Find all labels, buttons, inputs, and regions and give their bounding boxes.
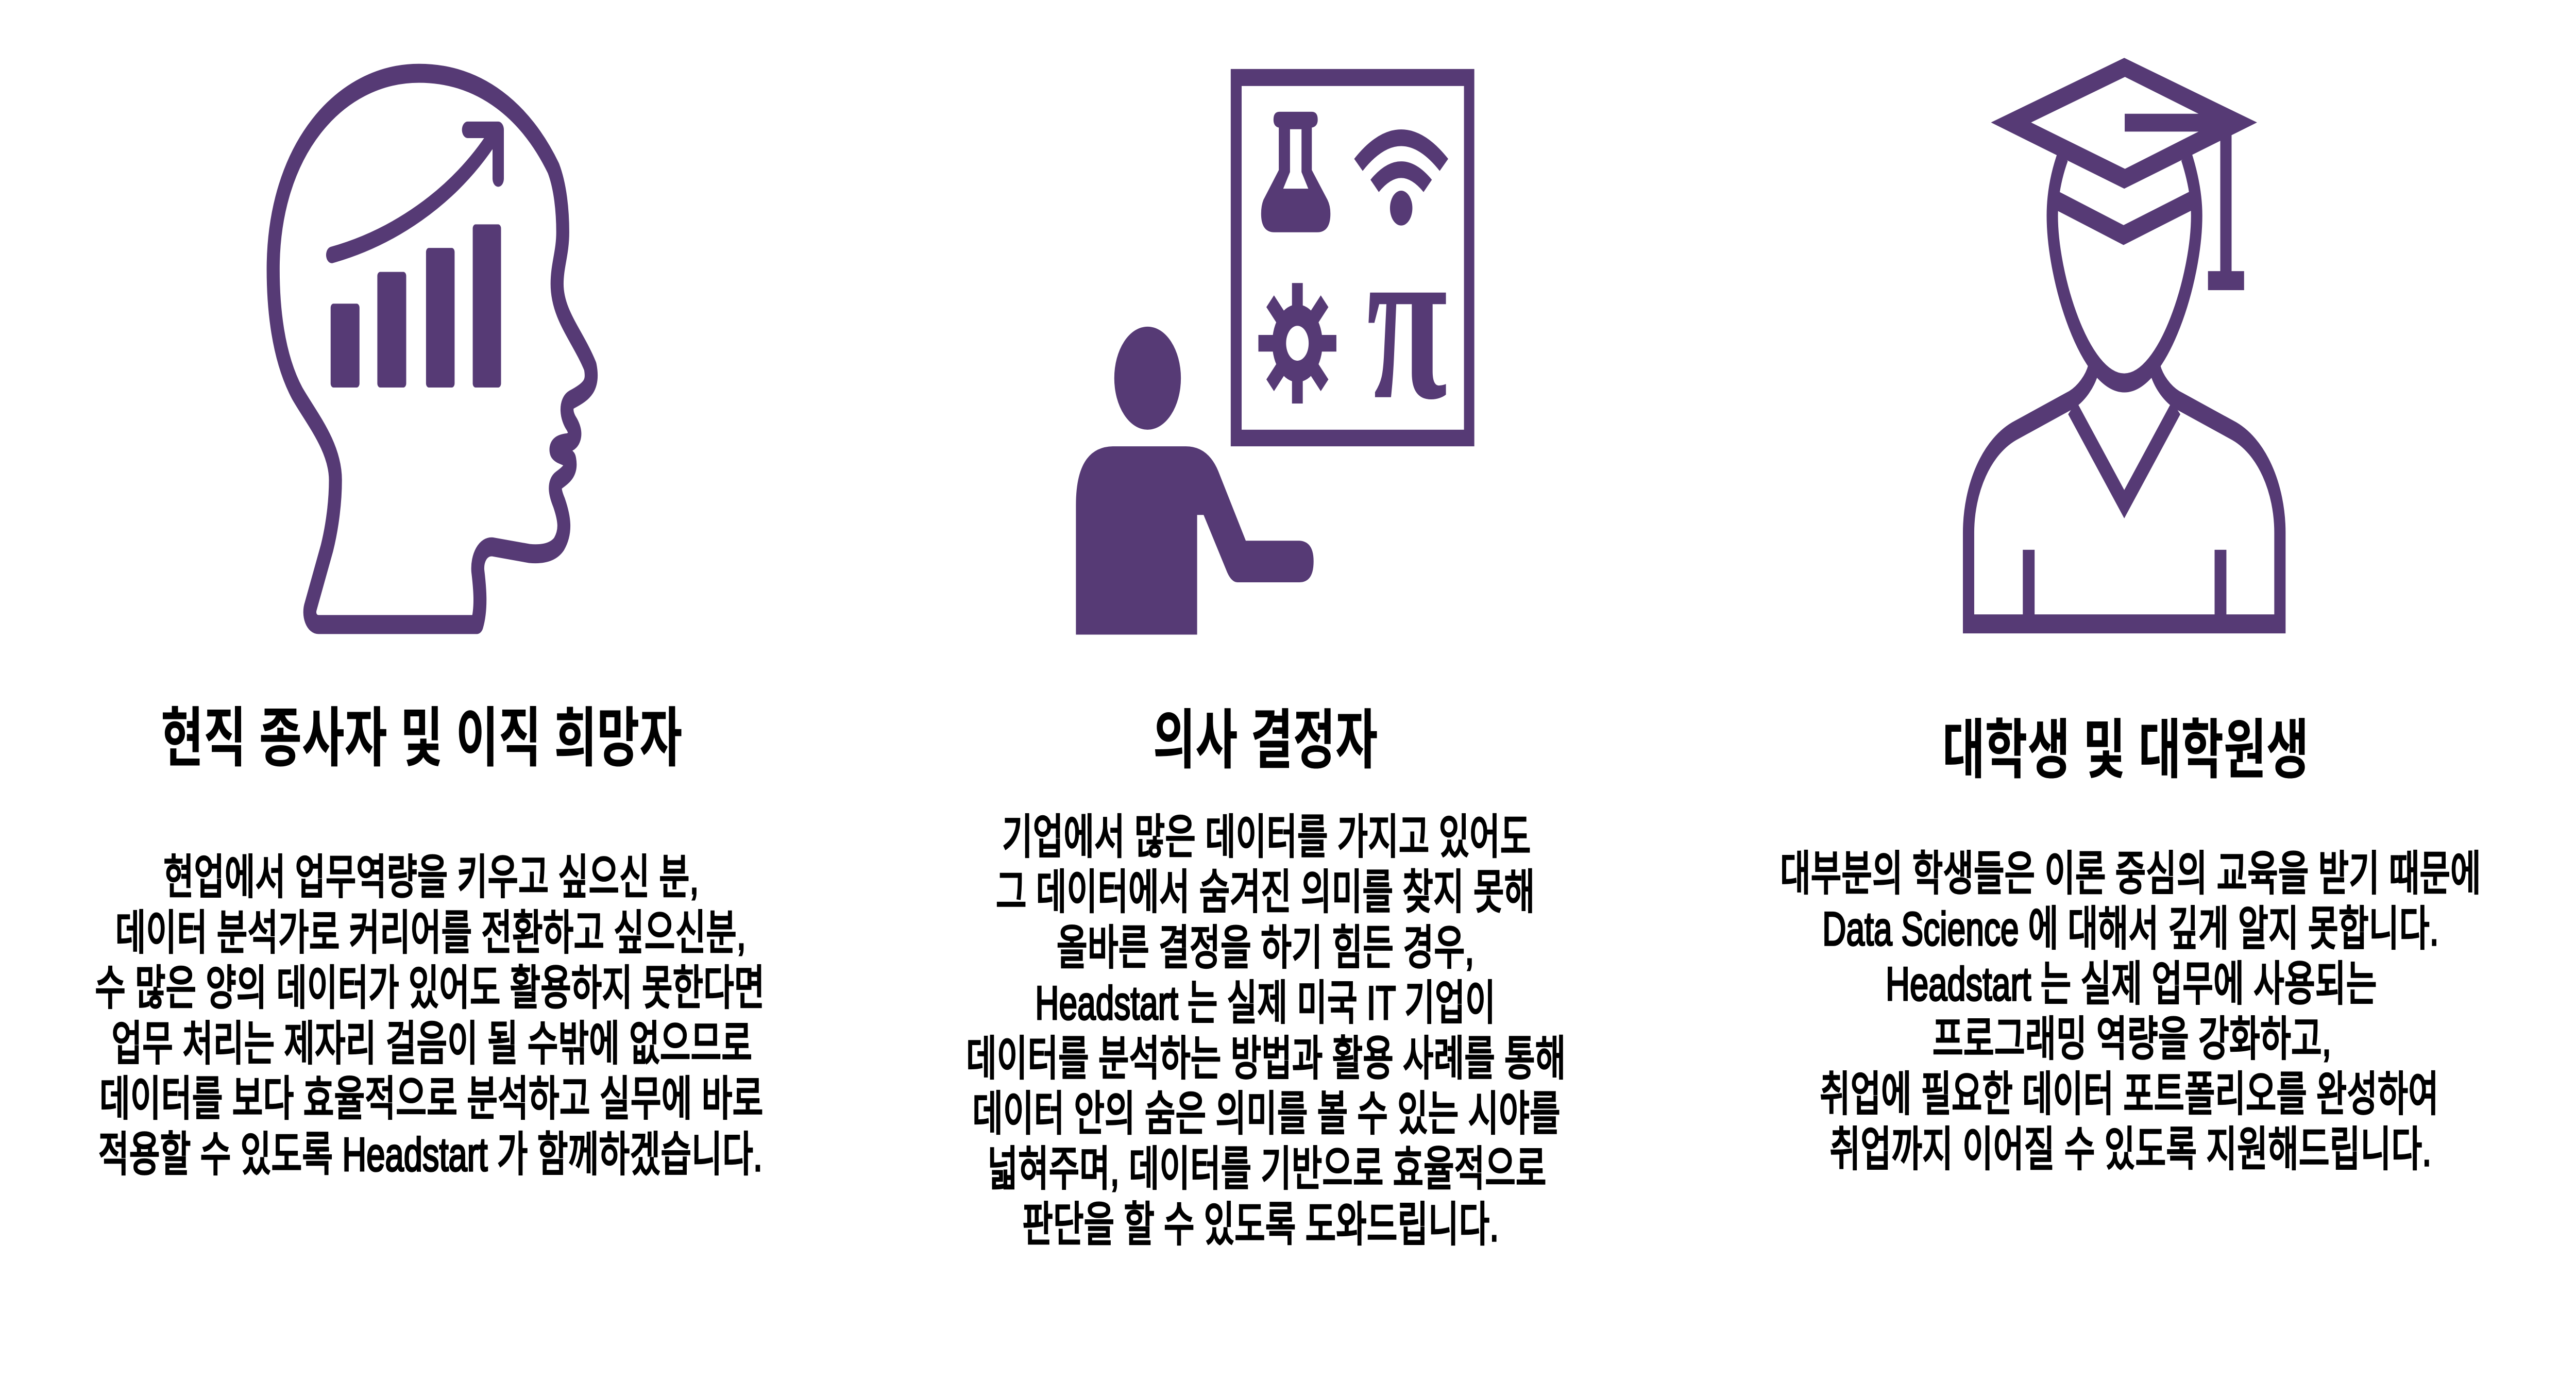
text block: working professionals: 데이터 분석가로 커리어를 전환하고 싶으신분,	[115, 906, 746, 960]
text block: students	[1780, 847, 2481, 1176]
text block: working professionals: 적용할 수 있도록 Headstart 가 함께하겠습니다.	[98, 1128, 762, 1181]
icon: head with growth chart	[273, 73, 591, 625]
text block: decision makers: 넓혀주며, 데이터를 기반으로 효율적으로	[987, 1142, 1546, 1196]
panel: working professionals	[95, 73, 765, 1181]
text block: decision makers: 올바른 결정을 하기 힘든 경우,	[1057, 921, 1474, 974]
text block: decision makers: 판단을 할 수 있도록 도와드립니다.	[1022, 1198, 1499, 1251]
text block: decision makers: 데이터를 분석하는 방법과 활용 사례를 통해	[966, 1032, 1566, 1085]
heading: decision makers: 의사 결정자	[1153, 704, 1378, 777]
icon: person presenting at board	[1076, 69, 1475, 634]
heading: working professionals: 현직 종사자 및 이직 희망자	[161, 702, 682, 775]
text block: working professionals: 데이터를 보다 효율적으로 분석하고 실무에 바로	[99, 1072, 763, 1125]
text block: students: Data Science 에 대해서 깊게 알지 못합니다.	[1822, 902, 2439, 955]
text block: students: 프로그래밍 역량을 강화하고,	[1933, 1013, 2331, 1066]
panel: decision makers	[966, 69, 1566, 1251]
icon: person presenting at board: π	[1367, 194, 1447, 447]
heading: students: 대학생 및 대학원생	[1942, 714, 2309, 787]
text block: working professionals: 업무 처리는 제자리 걸음이 될 수밖에 없으므로	[111, 1017, 752, 1070]
text block: decision makers: 기업에서 많은 데이터를 가지고 있어도	[1002, 811, 1531, 864]
panel: students	[1780, 58, 2481, 1176]
text block: decision makers: 그 데이터에서 숨겨진 의미를 찾지 못해	[996, 866, 1535, 919]
text block: students: 취업에 필요한 데이터 포트폴리오를 완성하여	[1820, 1068, 2439, 1121]
text block: students: 취업까지 이어질 수 있도록 지원해드립니다.	[1829, 1123, 2431, 1176]
text block: working professionals: 수 많은 양의 데이터가 있어도 활용하지 못한다면	[95, 962, 765, 1015]
text block: decision makers: 데이터 안의 숨은 의미를 볼 수 있는 시야를	[972, 1087, 1561, 1140]
text block: decision makers	[966, 811, 1566, 1251]
text block: students: 대부분의 학생들은 이론 중심의 교육을 받기 때문에	[1780, 847, 2481, 900]
text block: students: Headstart 는 실제 업무에 사용되는	[1886, 957, 2377, 1011]
text block: working professionals: 현업에서 업무역량을 키우고 싶으신 분,	[163, 851, 699, 904]
text block: decision makers: Headstart 는 실제 미국 IT 기업이	[1035, 977, 1496, 1030]
text block: working professionals	[95, 851, 765, 1181]
icon: graduate with cap	[1969, 58, 2280, 625]
